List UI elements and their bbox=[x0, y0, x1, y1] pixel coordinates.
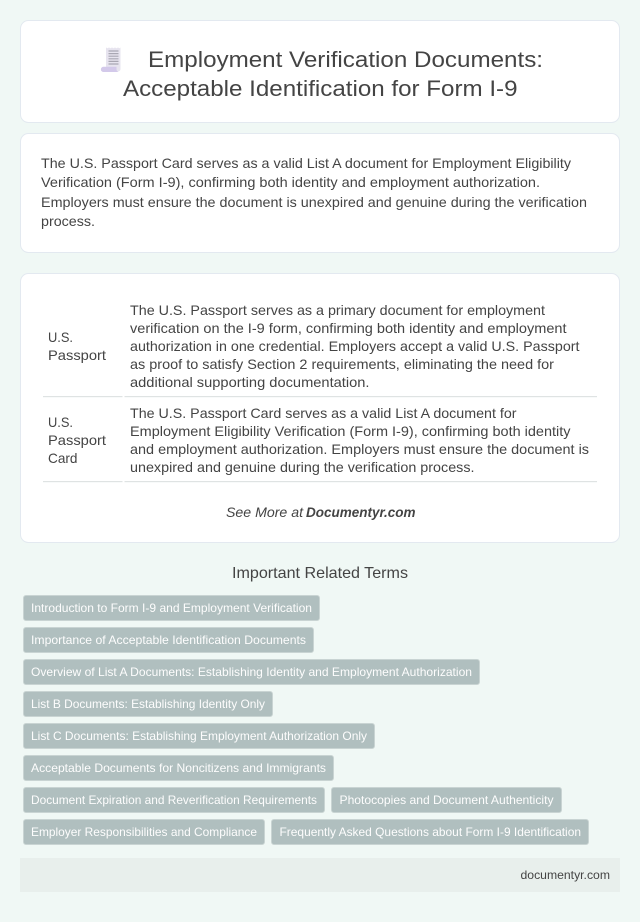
chip: List C Documents: Establishing Employment Authorization Only bbox=[31, 729, 367, 743]
chip: Importance of Acceptable Identification Documents bbox=[31, 633, 306, 647]
chip: Acceptable Documents for Noncitizens and Immigrants bbox=[31, 761, 326, 775]
title: Employment Verification Documents: bbox=[148, 47, 543, 72]
table row: U.S. Passport Card: The U.S. Passport Card serves as a valid List A document for bbox=[130, 405, 517, 421]
table row: U.S. Passport Card: unexpired and genuine during the verification process. bbox=[130, 459, 474, 475]
icon: document receipt bbox=[101, 48, 120, 72]
chip: Document Expiration and Reverification Requirements bbox=[31, 793, 317, 807]
panel: summary text: Employers must ensure the document is unexpired and genuine during the verification bbox=[41, 194, 587, 210]
chip bbox=[332, 788, 562, 812]
chip: Overview of List A Documents: Establishing Identity and Employment Authorization bbox=[31, 665, 472, 679]
chips: related terms bbox=[24, 596, 588, 844]
table row: U.S. Passport: Passport bbox=[48, 347, 106, 363]
panel: title card bbox=[20, 20, 620, 122]
footer bbox=[20, 858, 620, 892]
chip bbox=[24, 692, 272, 716]
table row: U.S. Passport: verification on the I-9 form, confirming both identity and employment bbox=[130, 320, 567, 336]
see more link: See More at bbox=[226, 504, 304, 520]
chip: Introduction to Form I-9 and Employment Verification bbox=[31, 601, 312, 615]
table row: U.S. Passport bbox=[43, 302, 597, 397]
chip: Photocopies and Document Authenticity bbox=[340, 793, 554, 807]
table row: U.S. Passport: as proof to satisfy Section 2 requirements, eliminating the need for bbox=[130, 356, 554, 372]
chip bbox=[24, 660, 480, 684]
table row: U.S. Passport Card: U.S. bbox=[48, 414, 73, 430]
table row: U.S. Passport: The U.S. Passport serves as a primary document for employment bbox=[130, 302, 545, 318]
table row: U.S. Passport Card: Employment Eligibility Verification (Form I-9), confirming both identity bbox=[130, 423, 570, 439]
panel: summary text: The U.S. Passport Card serves as a valid List A document for Employment Eligibility bbox=[41, 155, 571, 171]
chip: List B Documents: Establishing Identity Only bbox=[31, 697, 265, 711]
see more link: Documentyr.com bbox=[306, 504, 416, 520]
table row: U.S. Passport Card: and employment authorization. Employers must ensure the document is bbox=[130, 441, 589, 457]
chip bbox=[24, 596, 320, 620]
chip bbox=[24, 756, 334, 780]
panel: summary text: process. bbox=[41, 213, 95, 229]
heading: related terms: Important Related Terms bbox=[232, 565, 408, 582]
chip bbox=[24, 628, 314, 652]
chip bbox=[272, 820, 588, 844]
title: Acceptable Identification for Form I-9 bbox=[123, 76, 518, 101]
table row: U.S. Passport: U.S. bbox=[48, 329, 73, 345]
chip bbox=[24, 724, 374, 748]
table row: U.S. Passport Card: Passport bbox=[48, 432, 106, 448]
chip: Frequently Asked Questions about Form I-9 Identification bbox=[280, 825, 581, 839]
table row: U.S. Passport: additional supporting documentation. bbox=[130, 374, 370, 390]
see more link bbox=[226, 504, 416, 520]
table row: U.S. Passport Card bbox=[43, 405, 597, 482]
title bbox=[123, 47, 543, 101]
panel: summary text bbox=[20, 134, 620, 252]
panel: summary text: Verification (Form I-9), confirming both identity and employment authorization. bbox=[41, 174, 540, 190]
chip bbox=[24, 788, 324, 812]
table row: U.S. Passport: authorization in one credential. Employers accept a valid U.S. Passport bbox=[130, 338, 580, 354]
chip: Employer Responsibilities and Compliance bbox=[31, 825, 257, 839]
chip bbox=[24, 820, 264, 844]
footer: documentyr.com bbox=[520, 868, 610, 882]
panel: document table bbox=[20, 274, 620, 542]
table row: U.S. Passport Card: Card bbox=[48, 450, 78, 466]
